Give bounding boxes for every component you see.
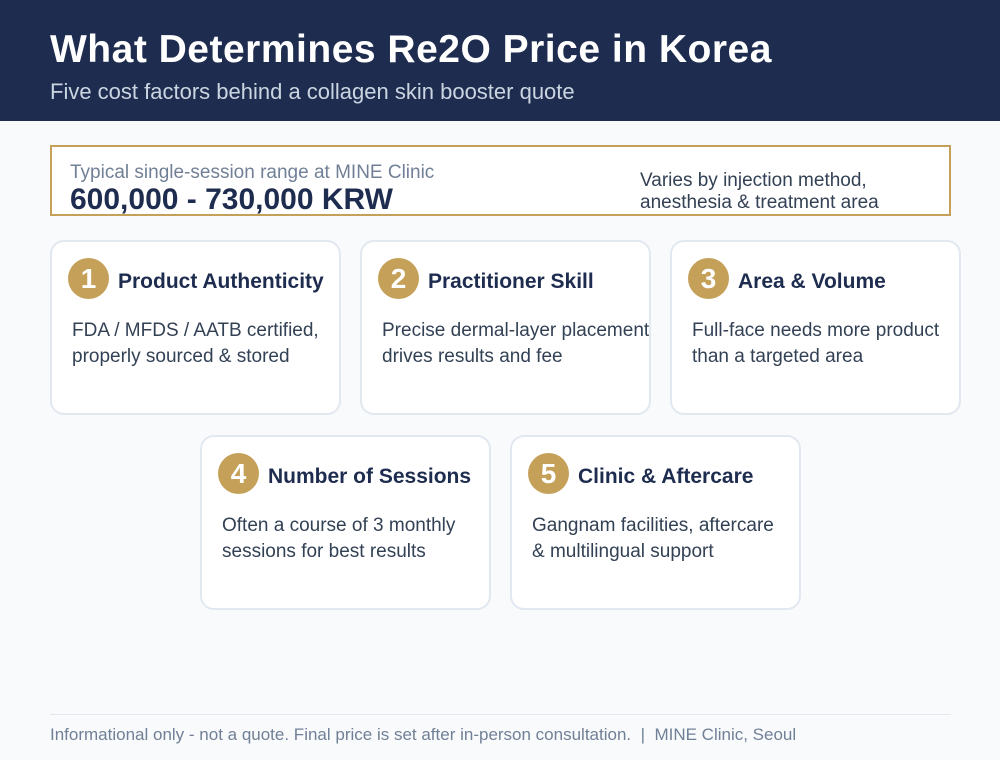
- range label: Typical single-session range at MINE Clinic: [70, 162, 434, 183]
- card 1 text: [72, 320, 319, 367]
- card 2 text: Precise dermal-layer placement: [382, 320, 649, 341]
- price range: 600,000 - 730,000 KRW: [70, 183, 393, 216]
- badge 5: [528, 453, 569, 494]
- price note: [640, 170, 879, 213]
- badge 2: 2: [391, 263, 406, 294]
- card 2 text: drives results and fee: [382, 346, 563, 367]
- price note: Varies by injection method,: [640, 170, 867, 191]
- title: What Determines Re2O Price in Korea: [50, 28, 772, 71]
- card 2 text: [382, 320, 649, 367]
- card 1 text: FDA / MFDS / AATB certified,: [72, 320, 319, 341]
- badge 3: 3: [701, 263, 716, 294]
- price range panel: [50, 145, 951, 216]
- card 3 text: than a targeted area: [692, 346, 863, 367]
- card 3: area and volume: [670, 240, 961, 415]
- card 1 heading: Product Authenticity: [118, 270, 324, 293]
- card 5 text: [532, 515, 774, 562]
- card 2 heading: Practitioner Skill: [428, 270, 594, 293]
- footer disclaimer: Informational only - not a quote. Final price is set after in-person consultation. | MINE Clinic, Seoul: [50, 725, 796, 744]
- card 1: product authenticity: [50, 240, 341, 415]
- badge 1: 1: [81, 263, 96, 294]
- card 4: number of sessions: [200, 435, 491, 610]
- card 2: practitioner skill: [360, 240, 651, 415]
- card 3 heading: Area & Volume: [738, 270, 886, 293]
- badge 4: 4: [231, 458, 246, 489]
- card 4 heading: Number of Sessions: [268, 465, 471, 488]
- badge 2: [378, 258, 419, 299]
- badge 4: [218, 453, 259, 494]
- card 3 text: [692, 320, 939, 367]
- card 4 text: [222, 515, 456, 562]
- badge 5: 5: [541, 458, 556, 489]
- badge 1: [68, 258, 109, 299]
- card 5 text: Gangnam facilities, aftercare: [532, 515, 774, 536]
- card 5: clinic and aftercare: [510, 435, 801, 610]
- card 4 text: sessions for best results: [222, 541, 426, 562]
- subtitle: Five cost factors behind a collagen skin booster quote: [50, 79, 575, 104]
- card 5 text: & multilingual support: [532, 541, 714, 562]
- badge 3: [688, 258, 729, 299]
- card 4 text: Often a course of 3 monthly: [222, 515, 455, 536]
- card 3 text: Full-face needs more product: [692, 320, 939, 341]
- header banner: [0, 0, 1000, 121]
- card 5 heading: Clinic & Aftercare: [578, 465, 753, 488]
- card 1 text: properly sourced & stored: [72, 346, 290, 367]
- price note: anesthesia & treatment area: [640, 192, 879, 213]
